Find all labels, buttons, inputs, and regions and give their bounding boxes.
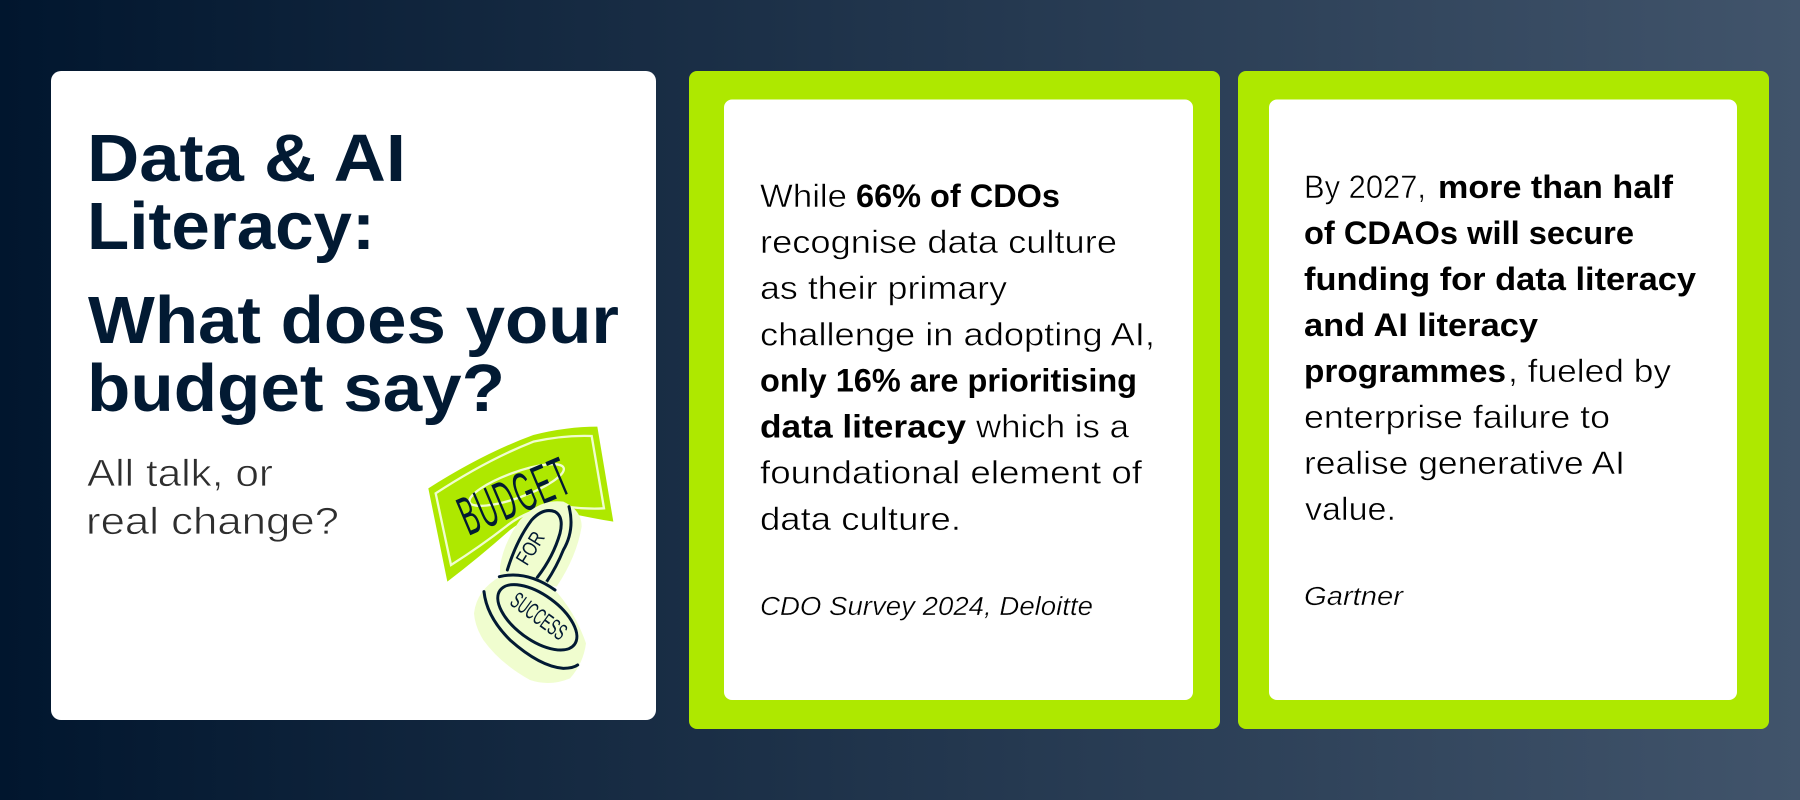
subtitle: real change? [86,501,339,543]
source: Gartner: Gartner [1304,583,1405,611]
subtitle: All talk, or [87,453,273,495]
icon part: FOR coin: FOR [511,527,549,569]
statement text: more than half of CDAOs: , fueled by [1508,353,1671,389]
statement text: 66% of CDOs: data culture. [760,501,961,537]
statement text: 66% of CDOs: as their primary [760,270,1007,306]
icon: budget for success banknote and coins [428,427,613,683]
statement text: more than half of CDAOs: enterprise failure to [1304,399,1610,435]
heading: Data & AI Literacy: Literacy: [87,189,375,264]
statement text: 66% of CDOs: which is a [975,408,1129,444]
statement text: 66% of CDOs: data literacy [760,408,966,444]
panel: Gartner prediction [1238,71,1769,729]
statement text: more than half of CDAOs: programmes [1304,353,1506,389]
icon part: BUDGET lettering: BUDGET [449,446,581,548]
statement text: more than half of CDAOs: of CDAOs will secure [1304,215,1634,251]
statement text: 66% of CDOs [760,178,1155,537]
statement text: 66% of CDOs: foundational element of [760,454,1142,490]
statement text: more than half of CDAOs: value. [1305,491,1396,527]
statement text: 66% of CDOs: 66% of CDOs [856,178,1060,214]
icon part: FOR coin [500,501,582,587]
icon part: green banknote [428,427,613,582]
statement text: more than half of CDAOs: more than half [1438,169,1673,205]
subtitle [86,453,339,543]
heading: What does your budget say?: What does your [88,283,619,358]
heading: What does your budget say? [87,283,619,426]
source: CDO Survey 2024, Deloitte: CDO Survey 2024, Deloitte [760,593,1093,621]
panel: title card [51,71,656,720]
statement text: more than half of CDAOs: funding for data literacy [1304,261,1696,297]
statement text: more than half of CDAOs: By 2027, [1304,169,1426,205]
icon part: SUCCESS coin [474,572,588,683]
statement text: 66% of CDOs: recognise data culture [760,224,1117,260]
statement text: more than half of CDAOs: and AI literacy [1304,307,1538,343]
heading: Data & AI Literacy [87,121,406,264]
statement text: 66% of CDOs: challenge in adopting AI, [760,316,1155,352]
statement text: 66% of CDOs: only 16% are prioritising [760,362,1137,398]
statement text: more than half of CDAOs: realise generative AI [1304,445,1625,481]
heading: What does your budget say?: budget say? [87,351,505,426]
statement text: more than half of CDAOs [1304,169,1696,527]
heading: Data & AI Literacy: Data & AI [87,121,406,196]
panel: Deloitte statistic [689,71,1220,729]
statement text: 66% of CDOs: While [760,178,847,214]
icon part: SUCCESS coin: SUCCESS [505,588,571,646]
